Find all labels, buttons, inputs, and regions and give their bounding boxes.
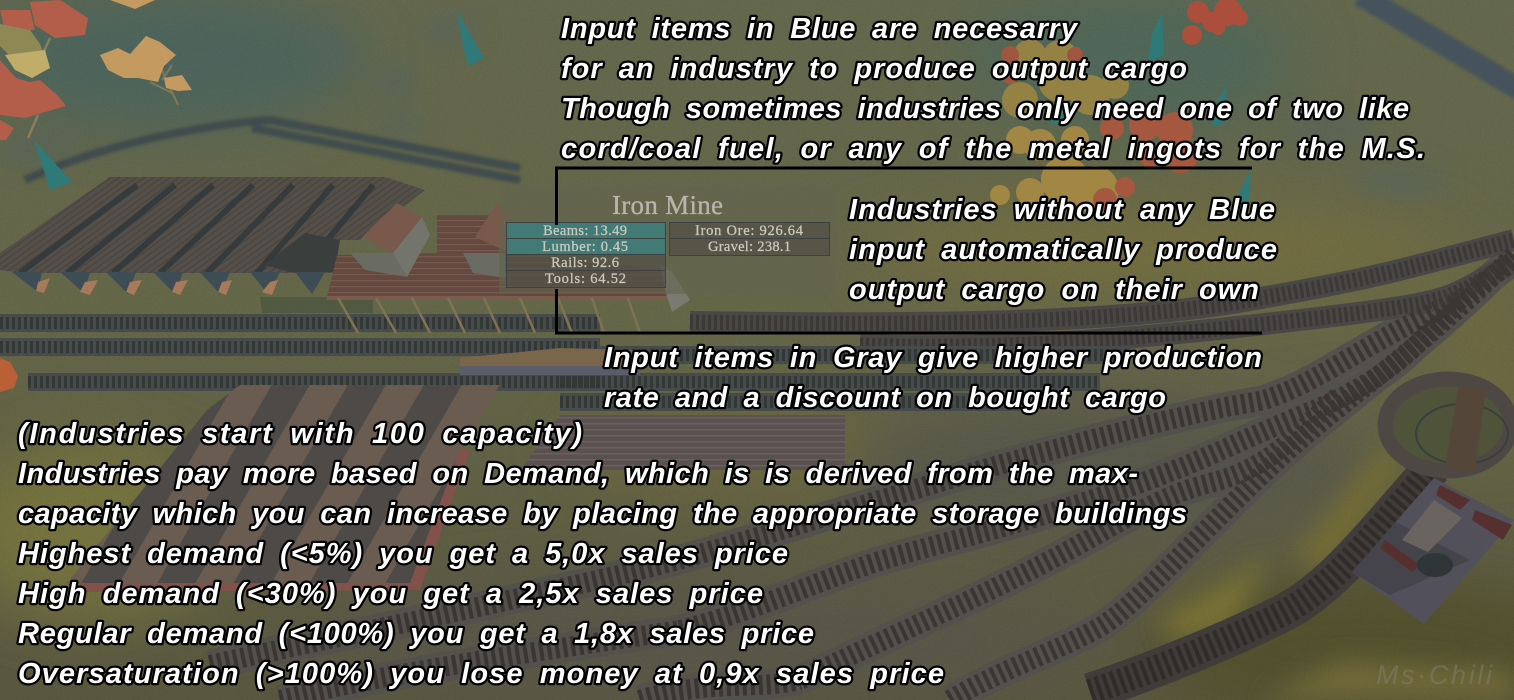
text block: demand and sales price [18, 418, 1187, 690]
distant curved rail tracks [25, 0, 1514, 180]
trees: left autumn cluster [0, 0, 88, 140]
building: long grey sawtooth shed [0, 177, 425, 313]
text block: no blue input: Industries without any Blue [849, 194, 1275, 226]
text block: gray input items [604, 342, 1262, 414]
text block: demand and sales price: Industries pay more based on Demand, which is is derived from the max- [18, 458, 1138, 490]
table: input items [506, 222, 666, 288]
trees: top centre autumn grove [990, 0, 1248, 214]
text block: demand and sales price: Oversaturation (>100%) you lose money at 0,9x sales price [18, 658, 944, 690]
text block: demand and sales price: (Industries start with 100 capacity) [18, 418, 582, 450]
table: input items: Beams: 13.49 [543, 223, 627, 239]
text block: demand and sales price: Highest demand (<5%) you get a 5,0x sales price [18, 538, 788, 570]
table: output cargo: Gravel: 238.1 [708, 239, 791, 255]
tree: tan tree [100, 0, 192, 105]
callout bracket lines [556, 168, 1262, 333]
rail tracks fanning across the yard [0, 240, 1514, 700]
text block: blue input items: for an industry to produce output cargo [561, 53, 1187, 85]
text block: gray input items: Input items in Gray give higher production [604, 342, 1262, 374]
text block: blue input items [561, 13, 1425, 165]
watermark: Ms Chili: Ms·Chili [1376, 660, 1493, 690]
table: output cargo: Iron Ore: 926.64 [695, 223, 804, 239]
text block: demand and sales price: Regular demand (<100%) you get a 1,8x sales price [18, 618, 814, 650]
table: input items: Tools: 64.52 [545, 271, 626, 287]
tree: orange tree at left edge [0, 358, 18, 392]
panel: Iron Mine industry window [499, 186, 836, 294]
text block: no blue input [849, 194, 1277, 306]
trees: conifers [34, 10, 1251, 210]
turntable and station plot [1352, 379, 1514, 624]
text block: demand and sales price: High demand (<30%) you get a 2,5x sales price [18, 578, 763, 610]
text block: gray input items: rate and a discount on bought cargo [604, 382, 1166, 414]
building: large striped warehouse roof [67, 348, 845, 592]
building: brown depot with towers [327, 203, 690, 333]
table: output cargo [670, 222, 830, 256]
text block: no blue input: output cargo on their own [849, 274, 1259, 306]
table: input items: Rails: 92.6 [551, 255, 619, 271]
heading: Iron Mine: Iron Mine [612, 190, 723, 220]
text block: blue input items: cord/coal fuel, or any of the metal ingots for the M.S. [561, 133, 1425, 165]
table: input items: Lumber: 0.45 [542, 239, 628, 255]
text block: blue input items: Though sometimes industries only need one of two like [561, 93, 1409, 125]
text block: no blue input: input automatically produce [849, 234, 1277, 266]
text block: blue input items: Input items in Blue are necesarry [561, 13, 1079, 45]
text block: demand and sales price: capacity which you can increase by placing the appropriate storage buildings [18, 498, 1187, 530]
